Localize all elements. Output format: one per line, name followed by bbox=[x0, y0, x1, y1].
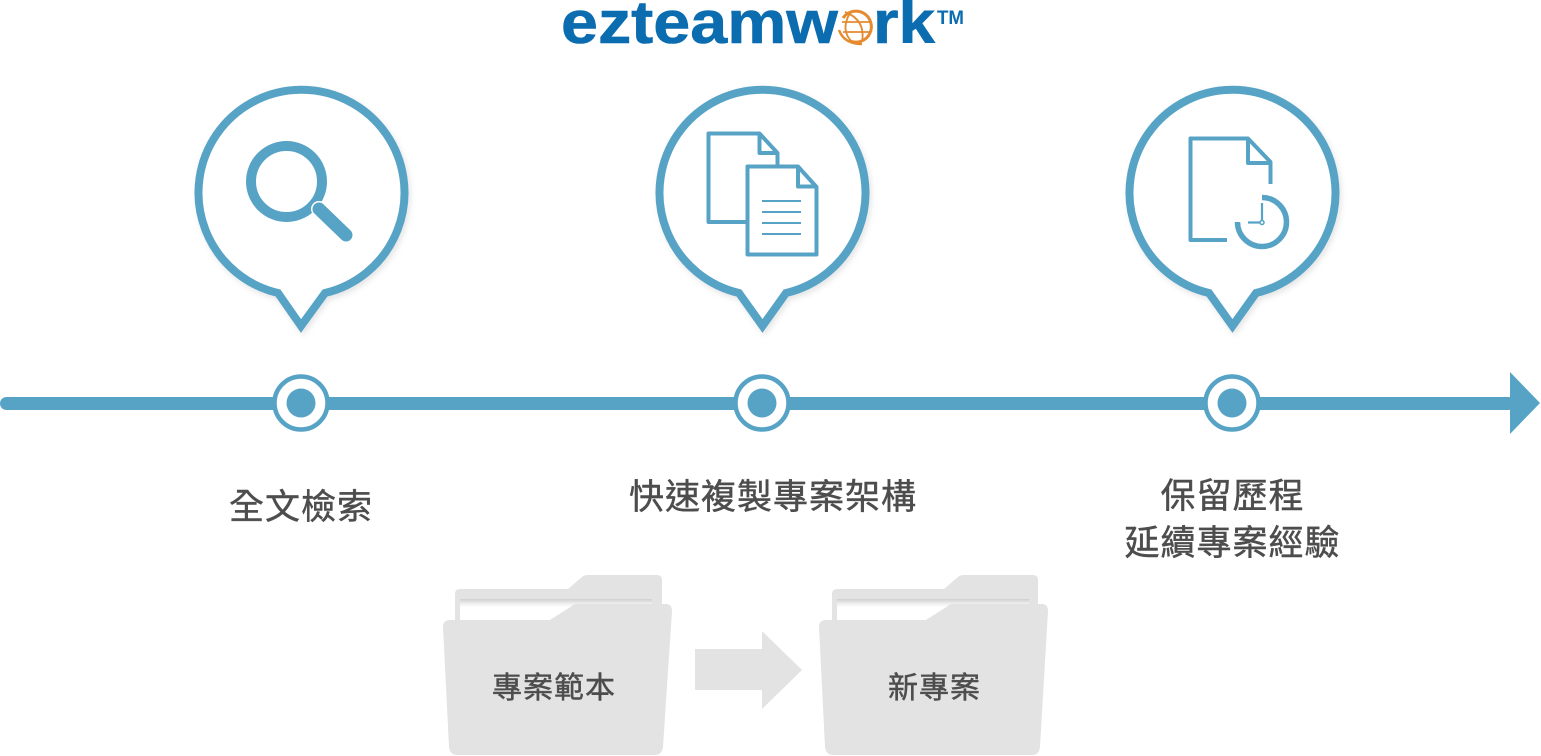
icon: document with clock bbox=[1190, 138, 1286, 246]
folder: new project bbox=[819, 575, 1048, 755]
bubble: copy project structure bbox=[660, 90, 866, 326]
icon: orange globe bbox=[839, 11, 871, 44]
folder label: 新專案 bbox=[888, 672, 981, 705]
label: keep history and continue experience: 保留歷程 bbox=[1160, 477, 1305, 516]
icon: two documents bbox=[708, 134, 816, 254]
arrow: template to new project bbox=[695, 631, 802, 709]
logo bbox=[561, 0, 964, 56]
label: keep history and continue experience bbox=[1124, 477, 1341, 563]
bubble: keep history bbox=[1130, 90, 1336, 326]
folder: project template bbox=[443, 575, 672, 755]
timeline node 2 bbox=[736, 376, 788, 430]
timeline node 3 bbox=[1206, 376, 1258, 430]
timeline arrow bbox=[0, 372, 1540, 434]
folder label: 專案範本 bbox=[492, 672, 616, 705]
icon: magnifier bbox=[251, 146, 346, 235]
timeline node 1 bbox=[274, 376, 328, 430]
label: copy project structure: 快速複製專案架構 bbox=[629, 478, 917, 517]
label: keep history and continue experience: 延續專案經驗 bbox=[1124, 524, 1341, 563]
logo: TM bbox=[937, 8, 964, 29]
label: full-text search: 全文檢索 bbox=[229, 488, 373, 527]
bubble: full-text search bbox=[199, 90, 404, 326]
